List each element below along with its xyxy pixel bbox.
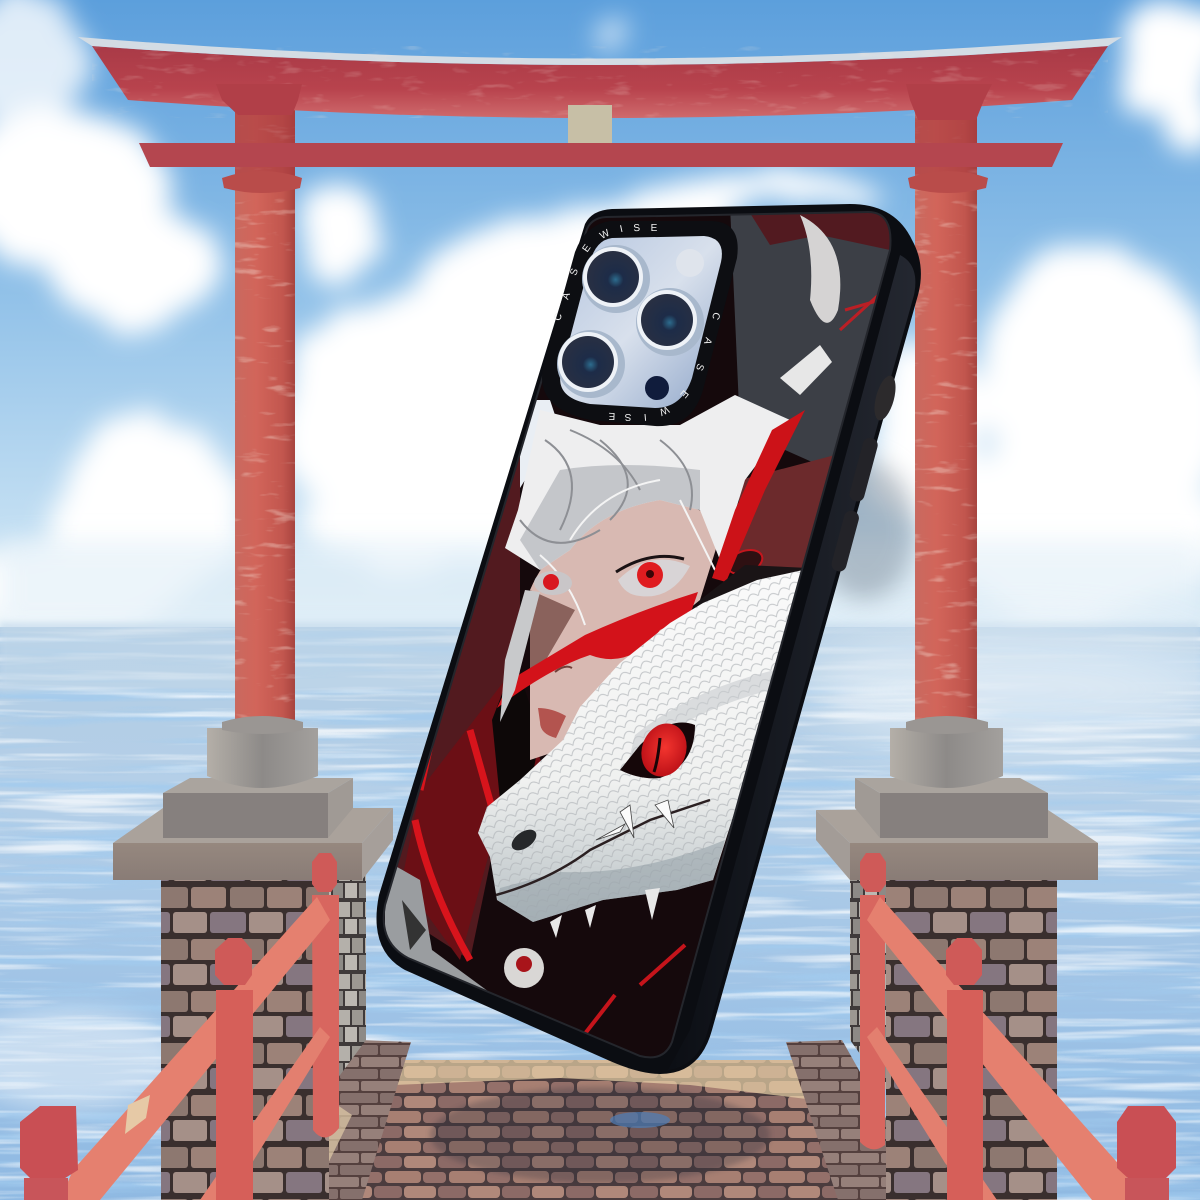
sea [0,622,1200,1200]
sunlit stones [394,1060,815,1100]
side button: volume down [830,509,860,573]
ring brand text: S [624,411,631,422]
right curb [786,1040,932,1200]
slab side [362,808,393,880]
step top [855,778,1048,793]
upper column shading [235,100,295,180]
brick pier [886,880,1057,1200]
braid [500,590,540,722]
ring brand text [552,223,722,422]
ring brand text: W [598,227,612,242]
middle post cap [946,938,982,985]
centre post [568,105,612,143]
ring brand text: S [693,362,706,372]
red cloak [402,680,550,960]
left column [235,100,295,722]
hair shadow region [492,673,536,797]
lower beam [139,143,1063,167]
dark creature upper right [730,215,889,462]
left eye [534,571,572,595]
slab top [816,808,1098,843]
middle post [947,990,983,1200]
lower fangs [550,888,660,938]
ring [222,716,303,734]
left upper collar [216,84,302,115]
ring brand text: A [560,291,573,301]
right column [915,100,977,722]
deep red corner [752,213,890,250]
left curb [266,1040,411,1200]
ring brand text: E [608,410,615,421]
camera island [560,236,722,408]
brow shading [625,670,775,775]
left ledge sunlit [266,1100,352,1200]
pearl ornament [504,948,544,988]
ring brand text: S [633,223,641,234]
upper rail [867,897,1137,1200]
ring brand text: I [619,224,624,235]
ring brand text: E [651,223,658,234]
middle post cap [215,938,252,985]
lens middle [636,288,704,356]
sky background [0,0,1200,630]
ring brand text: C [709,311,722,321]
lower rail [867,1027,997,1200]
lower rail [200,1027,330,1200]
worn paint [125,1095,150,1134]
ring brand text: S [568,267,581,277]
hair strands [520,430,692,543]
ring brand text: E [677,388,690,400]
camera ring [542,221,738,426]
rear post [312,895,339,1138]
brick pier [161,880,329,1200]
right lower collar [908,171,988,193]
ring brand text: W [657,403,671,417]
right background above dragon [738,456,832,568]
torii gate [78,37,1122,722]
left lower collar [222,171,302,193]
sky reflection on the left [520,400,555,488]
white hair [505,395,790,570]
bright cloak strokes [415,700,492,960]
drum [207,728,318,788]
teeth [596,800,674,840]
step top [163,778,353,793]
face gloss edge [384,212,891,1057]
near post cap [1117,1106,1176,1180]
brick side [329,868,366,1090]
artwork base [430,216,810,1056]
left railing [20,853,339,1200]
pearl centre [516,956,532,972]
rear post [860,895,885,1149]
rear post cap [312,853,337,892]
ring brand text: I [643,411,647,422]
upper rail [60,897,330,1200]
step side [855,778,880,838]
lens top [582,245,650,313]
top beam [92,46,1108,118]
dark band along crest [699,565,802,605]
rear post cap [860,853,886,892]
right eye [616,556,690,596]
near post [1125,1178,1169,1200]
dragon head [470,560,810,938]
right upper collar [906,84,992,120]
mouth line [496,800,710,895]
top beam cap [78,37,1122,65]
column weathering [235,100,977,722]
dragon eye [620,722,695,778]
beam weathering [92,46,1108,118]
left pillar base [113,716,393,1200]
near post cap [20,1106,78,1180]
right railing [860,853,1176,1200]
red ribbon [497,592,698,708]
red crest stripe [712,410,805,582]
lidar [645,376,669,400]
pale strands over forehead [540,480,715,625]
red slashes [839,294,877,331]
walkway cobbles [355,1060,850,1200]
case artwork [370,205,900,1065]
white horn [800,215,840,323]
slab front [113,843,362,880]
side button: volume up [848,436,879,503]
slab front [850,843,1098,880]
dragon scales [478,570,801,918]
white feather [780,345,832,395]
face skin [530,495,725,760]
lower red accents [580,945,685,1040]
lower left armour [385,867,487,990]
brick side [850,868,886,1090]
ring [906,716,988,734]
slab top [113,808,393,843]
case body [376,204,921,1074]
step front [880,793,1048,838]
ring brand text: E [581,242,594,254]
clouds [0,0,1200,630]
lens bottom [557,330,625,398]
case side sheen [668,255,915,1070]
drum [890,728,1003,788]
ring brand text: A [701,336,714,346]
dark red side panel [398,456,520,956]
flash [676,249,704,277]
water puddle [610,1112,670,1128]
slab side [816,810,850,880]
nose [555,667,572,672]
ring brand text: C [552,312,565,322]
walkway [266,1040,932,1200]
hair shading [520,465,700,570]
side button: action [870,373,900,423]
right pillar base [816,716,1098,1200]
middle post [216,990,253,1200]
nostril [512,830,536,850]
face shadow [530,590,575,668]
small eye behind [730,549,764,574]
lower jaw shading [497,840,725,922]
phone in case [370,204,921,1074]
phone shadow and water [430,1087,770,1183]
lips [538,708,566,738]
armour shadow [402,900,426,950]
step side [328,778,353,838]
near post [24,1178,68,1200]
step front [163,793,328,838]
